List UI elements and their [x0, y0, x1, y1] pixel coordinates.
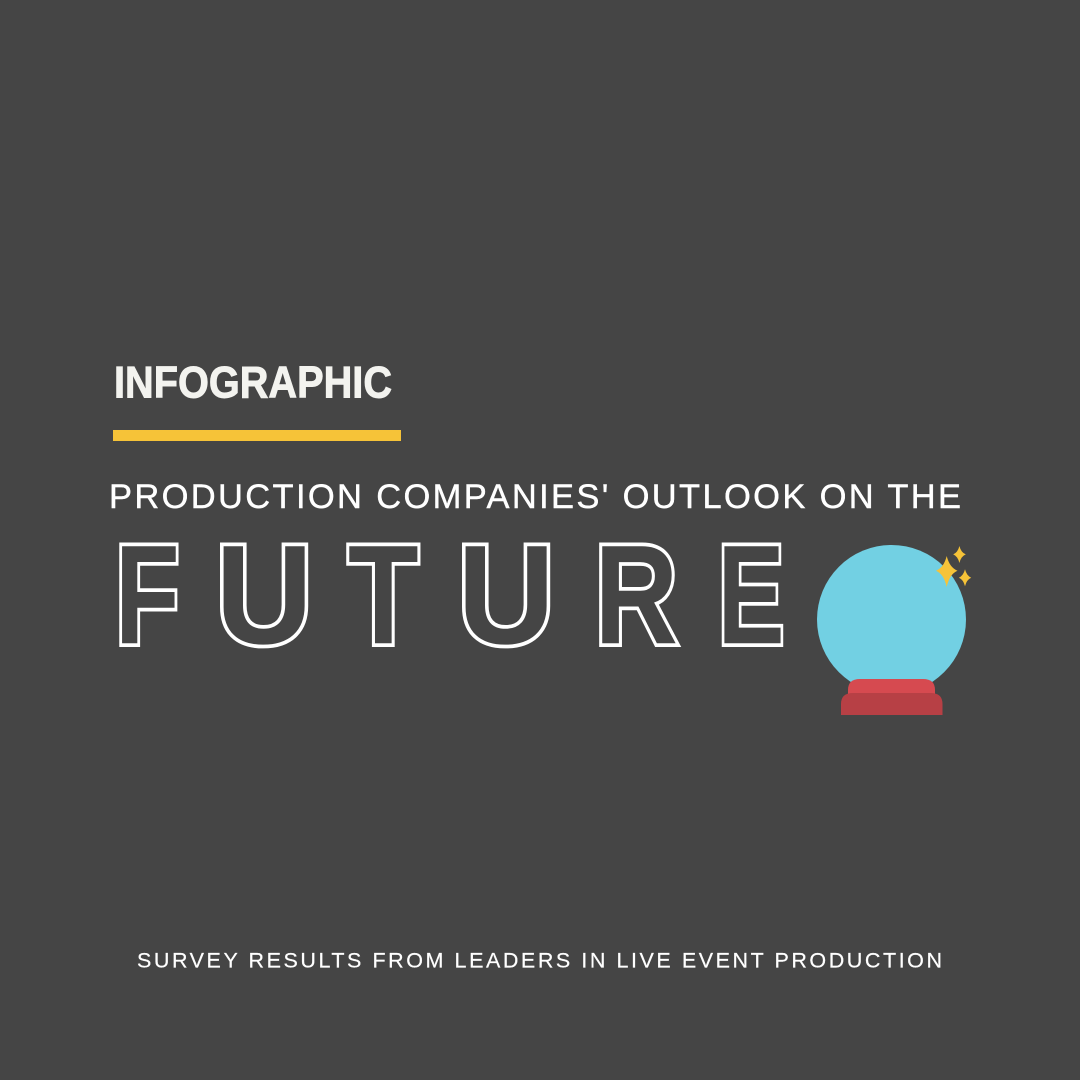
label: INFOGRAPHIC: INFOGRAPHIC — [114, 359, 392, 408]
heading: FUTURE outlined letters: U — [216, 517, 313, 674]
heading: FUTURE outlined letters: U — [458, 517, 555, 674]
sparkle top — [953, 546, 966, 563]
crystal ball globe — [817, 545, 966, 694]
heading: FUTURE outlined letters — [115, 515, 784, 674]
crystal ball upper base — [848, 679, 935, 695]
heading: FUTURE outlined letters: R — [594, 516, 678, 674]
sparkle right — [959, 569, 971, 586]
icon: crystal ball — [817, 545, 971, 715]
heading: production companies' outlook on the: PRODUCTION COMPANIES' OUTLOOK ON THE — [109, 478, 961, 516]
heading: FUTURE outlined letters: T — [348, 516, 419, 674]
crystal ball lower base — [841, 693, 942, 715]
yellow accent bar — [113, 430, 401, 441]
heading: FUTURE outlined letters: F — [115, 517, 180, 674]
heading: FUTURE outlined letters: E — [718, 515, 784, 673]
subtitle: survey results: SURVEY RESULTS FROM LEADERS IN LIVE EVENT PRODUCTION — [137, 949, 942, 973]
sparkle large — [936, 556, 958, 587]
